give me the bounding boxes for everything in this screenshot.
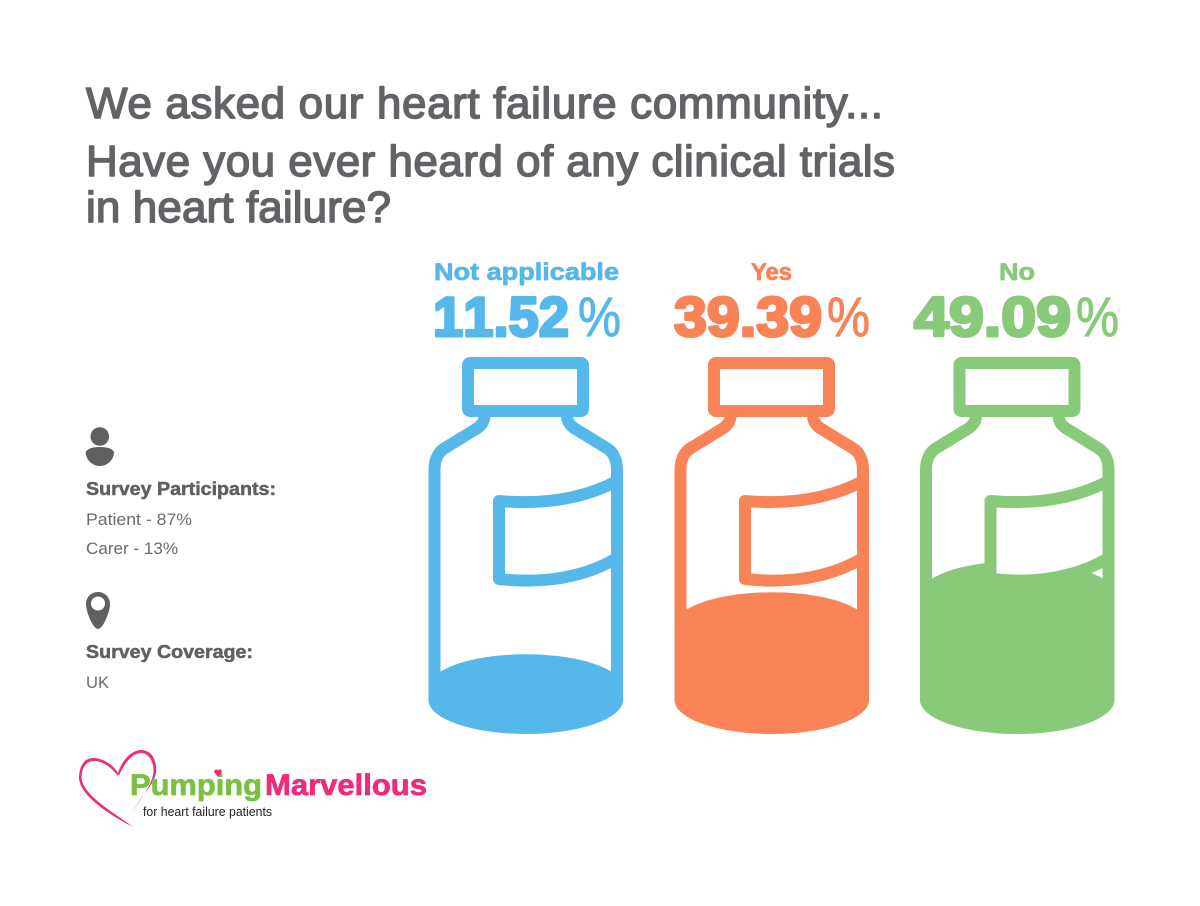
title xyxy=(86,79,895,232)
value: 49.09% xyxy=(914,285,1119,348)
value: 49.09%: 49.09 xyxy=(914,285,1071,348)
icon: orange bottle 39.39% full xyxy=(674,363,869,734)
icon: location pin xyxy=(86,592,110,629)
label: not applicable: Not applicable xyxy=(434,259,619,286)
icon: logo heart xyxy=(79,750,156,827)
heading: survey coverage: Survey Coverage: xyxy=(86,642,253,662)
text: carer share: Carer - 13% xyxy=(86,539,178,558)
icon: green bottle 49.09% full xyxy=(920,363,1114,734)
panel: survey participants xyxy=(86,427,276,558)
icon: person xyxy=(86,427,114,466)
panel: survey coverage xyxy=(86,592,253,692)
title: Have you ever heard of any clinical trials xyxy=(86,137,895,186)
logo wordmark: Marvellous: Marvellous xyxy=(265,769,427,802)
heading: survey participants: Survey Participants: xyxy=(86,479,276,499)
value: 39.39%: 39.39 xyxy=(674,285,822,348)
label: yes: Yes xyxy=(751,259,792,286)
value: 49.09%: % xyxy=(1076,285,1119,348)
label: no: No xyxy=(999,259,1035,286)
text: UK: UK xyxy=(86,673,110,692)
panel: not applicable result xyxy=(428,259,623,734)
logo: Pumping Marvellous xyxy=(79,750,427,827)
title: in heart failure? xyxy=(86,183,391,232)
icon: small heart over the i xyxy=(214,769,222,777)
value: 11.52%: % xyxy=(578,285,621,348)
value: 11.52%: 11.52 xyxy=(433,285,569,348)
text: patient share: Patient - 87% xyxy=(86,510,192,529)
logo wordmark: Pumping: Pumping xyxy=(130,769,262,802)
panel: no result xyxy=(914,259,1119,734)
icon: blue bottle 11.52% full xyxy=(428,363,623,734)
value: 39.39%: % xyxy=(827,285,870,348)
title: We asked our heart failure community... xyxy=(86,79,883,128)
panel: yes result xyxy=(674,259,870,734)
logo tagline: for heart failure patients xyxy=(143,805,272,819)
